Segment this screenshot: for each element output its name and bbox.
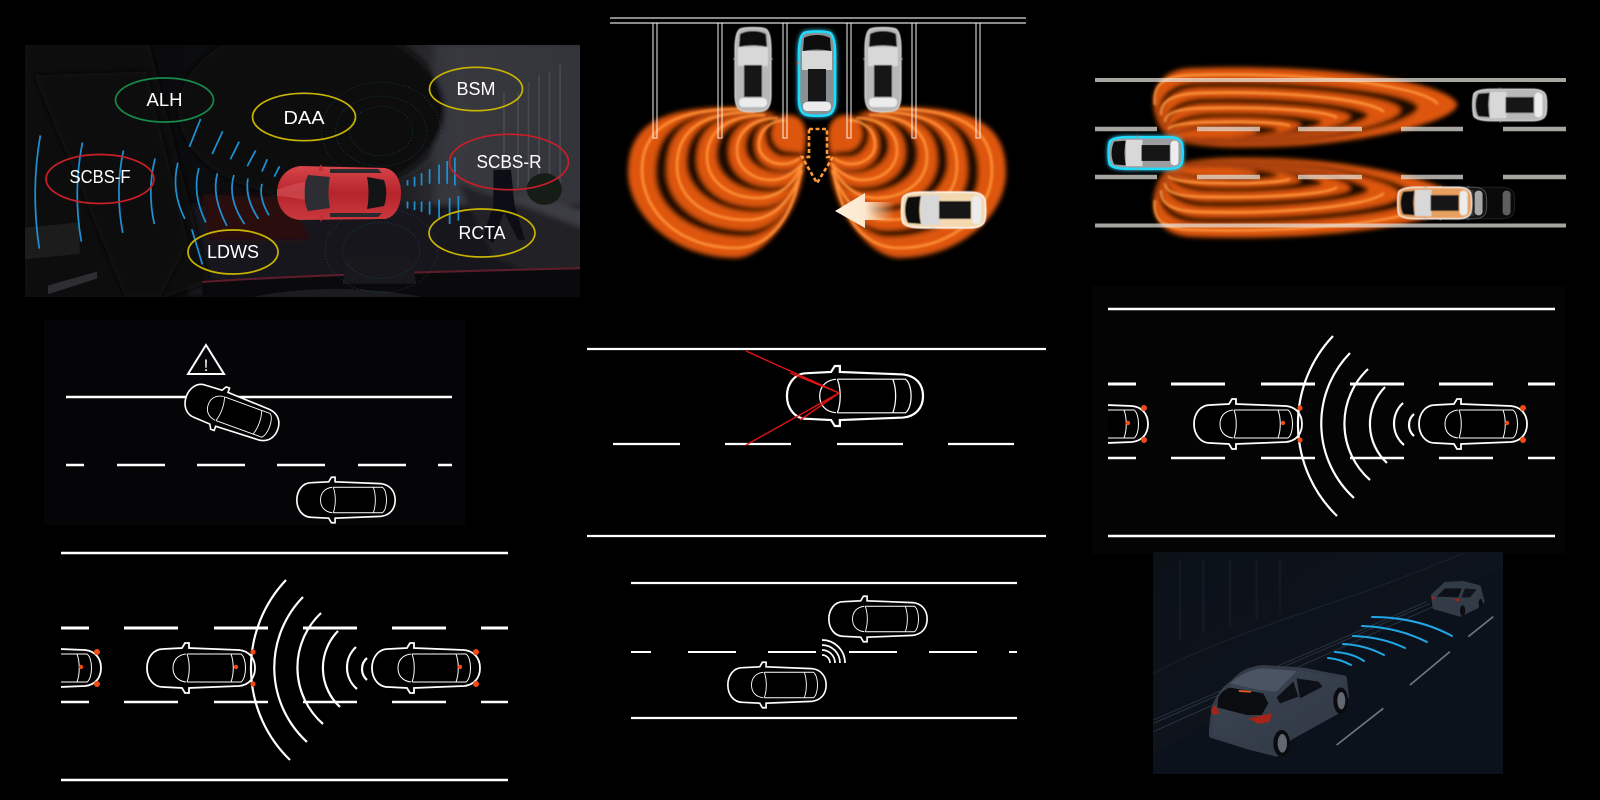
label: RCTA: [429, 209, 535, 257]
label: SCBS-R: SCBS-R: [476, 152, 542, 172]
small radar waves: [822, 640, 845, 663]
panel: night road radar photo: [1153, 552, 1507, 780]
label: SCBS-F: [46, 154, 154, 204]
warning triangle icon: [188, 345, 224, 375]
panel: following distance, lower left: [0, 553, 508, 780]
left detection lobe: [628, 107, 807, 258]
night backdrop: [1153, 552, 1503, 774]
red camera sight lines: [746, 351, 839, 445]
label: DAA: DAA: [284, 108, 324, 128]
label: RCTA: RCTA: [458, 223, 506, 243]
label: BSM: [430, 67, 522, 111]
dashed lane: [631, 651, 1017, 653]
parked silver car left: [733, 28, 773, 112]
label: ALH: ALH: [146, 90, 182, 110]
street scene backdrop: [25, 45, 580, 297]
panel backdrop: [44, 320, 465, 525]
lane lines: [1095, 80, 1566, 226]
distance diagram: [1040, 309, 1555, 536]
drifting car: [179, 375, 285, 451]
dashed lane: [66, 464, 452, 466]
blue host car: [1109, 135, 1183, 171]
right detection lobe: [827, 107, 1006, 258]
label: BSM: BSM: [456, 79, 496, 99]
reversing blue car: [797, 32, 837, 116]
car in adjacent lane: [297, 477, 395, 523]
blue radar arcs: [1328, 617, 1452, 665]
road and streaks: [1153, 553, 1494, 746]
label: LDWS: LDWS: [207, 242, 259, 262]
panel: blind spot monitoring: [1095, 67, 1566, 238]
parked silver car right: [863, 28, 903, 112]
panel: lane departure warning: [44, 320, 465, 525]
approaching car arrow: [835, 193, 895, 228]
panel: adjacent car warning: [631, 583, 1017, 718]
vehicle in blind spot with ghost trail: [1398, 185, 1515, 221]
dashed lane: [613, 443, 1014, 445]
car lower lane: [728, 662, 826, 708]
label: LDWS: [188, 230, 278, 274]
road edges: [587, 349, 1046, 536]
car outline: [787, 366, 923, 426]
label: SCBS-F: SCBS-F: [70, 167, 130, 187]
road lines: [66, 396, 452, 398]
red car top view: [277, 164, 401, 222]
warning triangle icon: !: [204, 356, 208, 375]
upper detection lobe: [1154, 67, 1457, 147]
panel: rear cross traffic alert in parking lot: [610, 18, 1026, 258]
sensor wave arcs: [35, 82, 458, 293]
silver car ahead: [1473, 87, 1547, 123]
car upper lane: [829, 596, 927, 642]
panel: windshield overview photo with sensor labels: [25, 45, 580, 297]
parking lines: [610, 18, 1026, 138]
approaching cream car: [902, 190, 986, 230]
dotted reversing arrow: [802, 129, 833, 183]
label: DAA: [252, 93, 356, 141]
label: ALH: [116, 78, 214, 122]
panel: following distance, upper right: [1040, 286, 1565, 554]
lower detection lobe: [1154, 158, 1457, 238]
panel: lane keep camera view: [587, 349, 1046, 536]
road edges: [631, 583, 1017, 718]
panel backdrop: [1092, 286, 1565, 554]
label: SCBS-R: [450, 134, 568, 190]
host hatchback: [1211, 667, 1348, 757]
car ahead: [1432, 582, 1484, 616]
